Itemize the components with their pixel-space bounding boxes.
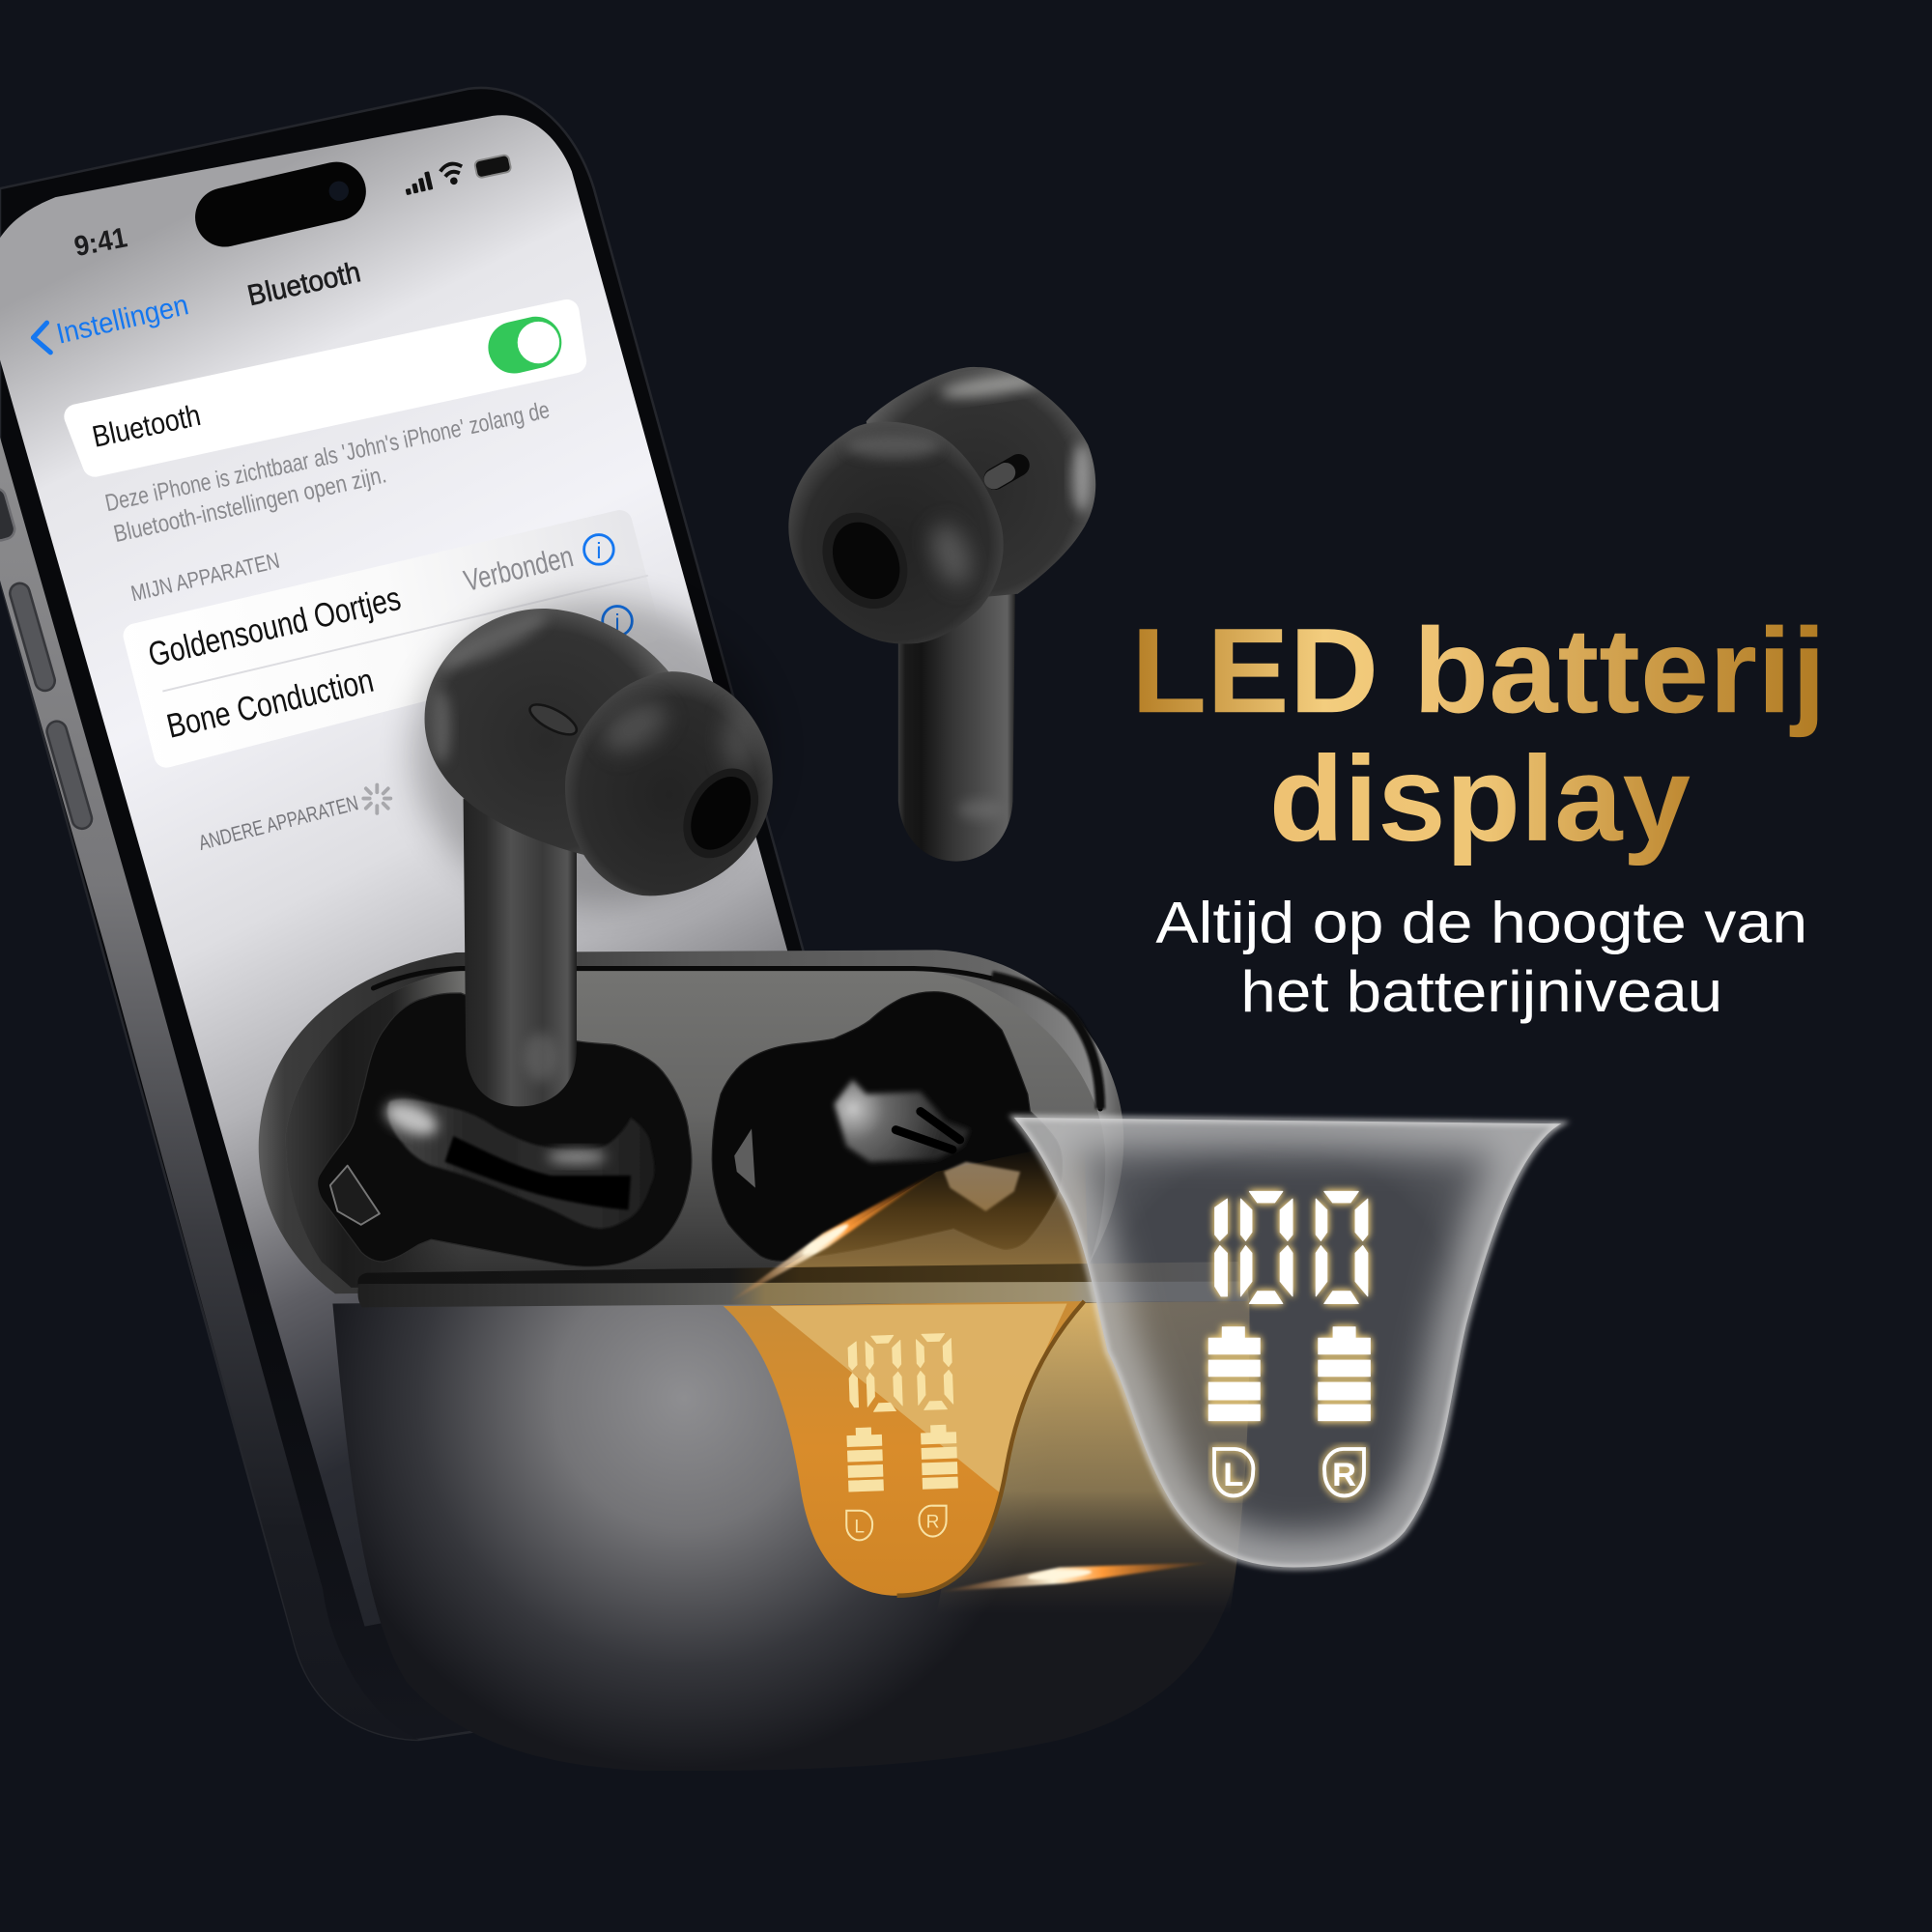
base rim top xyxy=(357,1262,1244,1287)
signal bars xyxy=(403,171,433,195)
info icon 2 xyxy=(603,607,632,636)
device 1 status: Verbonden xyxy=(461,539,577,598)
right cavity nozzle xyxy=(944,1162,1020,1211)
subtitle line 2: het batterijniveau xyxy=(1240,959,1722,1024)
icon R small xyxy=(919,1506,947,1537)
hologram display xyxy=(1014,1118,1561,1567)
subtitle line 1: Altijd op de hoogte van xyxy=(1155,891,1807,955)
hologram panel xyxy=(1014,1118,1561,1567)
spinner xyxy=(363,784,390,813)
right tip hole xyxy=(806,497,924,624)
divider xyxy=(162,576,648,692)
phone screen xyxy=(0,115,788,1627)
phone body xyxy=(0,88,804,1740)
light beam xyxy=(936,1301,1250,1614)
right mesh xyxy=(980,450,1034,494)
back chevron xyxy=(33,323,50,353)
case lid xyxy=(259,950,1123,1303)
right tip highlights xyxy=(846,434,979,590)
left tip hole xyxy=(668,755,774,871)
subtitle xyxy=(1155,891,1807,1024)
earbud shadow xyxy=(412,598,770,906)
title line 1: LED batterij xyxy=(1131,604,1826,738)
left body highlights xyxy=(431,605,552,764)
left cavity xyxy=(318,993,692,1266)
left body xyxy=(425,609,678,863)
side button small xyxy=(0,486,17,543)
left cavity nozzle xyxy=(330,1166,380,1225)
left cavity highlight 2 xyxy=(547,1150,607,1164)
right body highlights xyxy=(939,369,1092,513)
lid right groove thick xyxy=(992,976,1100,1109)
right stem bottom highlight xyxy=(957,800,1002,819)
info icon 1: i xyxy=(596,538,601,563)
right body xyxy=(867,367,1095,604)
flare upper xyxy=(727,1172,936,1303)
devices panel xyxy=(135,523,648,755)
base body xyxy=(332,1293,1250,1771)
hologram icon R: R xyxy=(1332,1457,1356,1493)
other devices label: ANDERE APPARATEN xyxy=(196,790,360,855)
nav title: Bluetooth xyxy=(244,256,363,312)
icon L small xyxy=(846,1511,872,1540)
lid groove xyxy=(373,969,1100,1109)
orange display xyxy=(724,1301,1084,1596)
battery icon xyxy=(474,155,512,179)
display readout xyxy=(843,1333,958,1492)
title xyxy=(1131,604,1826,867)
right tip xyxy=(788,421,1004,644)
description line 2: Bluetooth-instellingen open zijn. xyxy=(111,461,389,548)
hologram icon L xyxy=(1214,1449,1253,1495)
lid inner panel xyxy=(286,970,1105,1288)
left cavity gloss xyxy=(387,1099,654,1229)
lid shell xyxy=(259,950,1123,1293)
side button lower xyxy=(44,719,94,831)
display bronze edge xyxy=(897,1301,1084,1596)
device 1 name: Goldensound Oortjes xyxy=(145,580,404,674)
left mesh xyxy=(526,698,581,740)
dynamic island xyxy=(189,156,372,253)
left tip xyxy=(565,671,773,895)
bluetooth row panel xyxy=(76,312,574,465)
earbud left xyxy=(412,598,774,1106)
back link: Instellingen xyxy=(53,289,191,351)
hologram edge xyxy=(1014,1118,1561,1567)
base rim side xyxy=(357,1282,1249,1307)
gold light cone xyxy=(727,1140,1090,1303)
display panel xyxy=(724,1301,1084,1596)
left cavity dark patch xyxy=(444,1136,631,1210)
phone silver side frame xyxy=(0,438,419,1740)
phone xyxy=(0,88,804,1740)
title line 2: display xyxy=(1269,732,1690,867)
wifi icon xyxy=(440,161,465,185)
right cavity window xyxy=(734,1128,755,1188)
toggle xyxy=(483,311,567,379)
hologram icon R xyxy=(1324,1449,1364,1495)
left cavity highlight xyxy=(382,1096,441,1142)
hologram readout xyxy=(1208,1191,1370,1421)
side button upper xyxy=(8,581,57,693)
flare lower xyxy=(936,1562,1213,1592)
earbud right xyxy=(788,367,1095,862)
camera dot xyxy=(329,182,349,201)
info icon 1 xyxy=(584,535,613,564)
right cavity xyxy=(712,992,1062,1261)
description line 1: Deze iPhone is zichtbaar als 'John's iPhone' zolang de xyxy=(102,396,552,517)
info icon 2: i xyxy=(614,610,620,635)
hologram icon L: L xyxy=(1223,1457,1243,1493)
status time: 9:41 xyxy=(71,221,129,263)
my devices label: MIJN APPARATEN xyxy=(128,548,282,606)
letter R small: R xyxy=(926,1513,939,1533)
hologram inner glow xyxy=(1014,1118,1561,1567)
device 2 name: Bone Conduction xyxy=(163,662,377,746)
left tip highlights xyxy=(595,693,756,771)
letter L small: L xyxy=(854,1518,865,1538)
left stem highlight xyxy=(525,1033,557,1082)
left stem xyxy=(464,799,577,1106)
case base xyxy=(332,1262,1250,1771)
lid inner shading xyxy=(286,970,1105,1288)
bluetooth row label: Bluetooth xyxy=(89,398,204,454)
right cavity dark marks xyxy=(895,1112,960,1150)
display sheen xyxy=(770,1303,1067,1493)
right cavity gloss xyxy=(835,1079,970,1162)
right stem xyxy=(898,579,1015,862)
